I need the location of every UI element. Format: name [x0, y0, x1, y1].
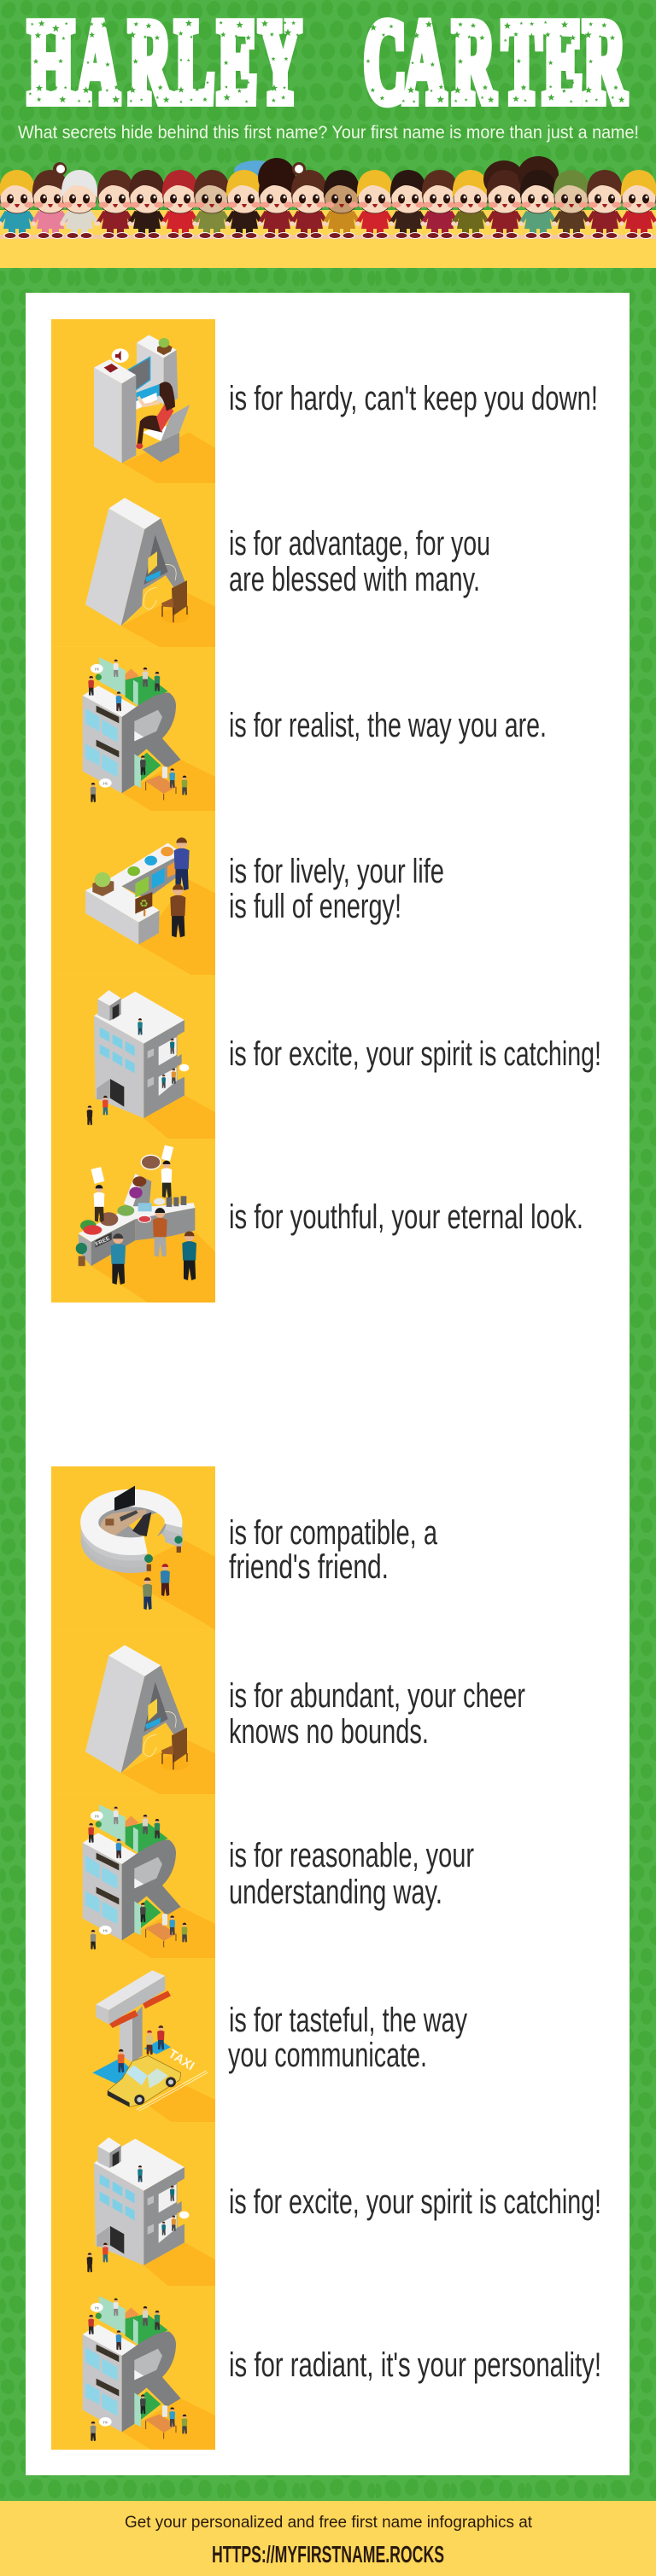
panel: white content card: [26, 293, 630, 2475]
row: R is for realist: [51, 647, 547, 811]
row: T is for tasteful: [51, 1958, 477, 2122]
illustration: letter C reception desk: [51, 1466, 215, 1630]
text: A lines: are blessed with many.: [229, 561, 480, 598]
row: R is for radiant: [51, 2286, 601, 2450]
text: A lines: knows no bounds.: [229, 1713, 429, 1751]
illustration: row of cartoon children holding hands: [0, 156, 656, 239]
title: Harley Carter: [28, 0, 627, 126]
illustration: letter R: [51, 2286, 215, 2450]
illustration: letter A: [51, 1630, 215, 1794]
text: C lines: is for compatible, a: [229, 1514, 438, 1552]
text: A lines: is for advantage, for you: [229, 525, 490, 562]
illustration: letter L recycling counter: [51, 811, 215, 975]
illustration: letter Y buffet: [51, 1139, 215, 1303]
text: A lines: is for abundant, your cheer: [229, 1677, 525, 1715]
footer url: HTTPS://MYFIRSTNAME.ROCKS: [212, 2541, 444, 2567]
illustration: letter R: [51, 1794, 215, 1958]
illustration: letter Y buffet: FREE: [95, 1235, 111, 1248]
illustration: letter L recycling counter: ♻: [139, 898, 149, 910]
illustration: letter A: [51, 483, 215, 647]
title star cut-outs: HARLEY: [28, 20, 299, 103]
illustration: letter H office desk: [51, 319, 215, 483]
title star cut-outs: CARTER: [366, 20, 624, 103]
row: Y is for youthful: [51, 1139, 583, 1303]
row: A is for abundant: [51, 1630, 535, 1794]
text: T lines: is for tasteful, the way: [229, 2002, 467, 2039]
footer text: Get your personalized and free first name infographics at: [125, 2514, 533, 2532]
illustration: letter T taxi stand: [51, 1958, 215, 2122]
row: H is for hardy: [51, 319, 598, 483]
illustration: letter E building: [51, 2122, 215, 2286]
yellow band behind the characters: [0, 210, 656, 268]
text: R lines: is for reasonable, your: [229, 1837, 474, 1874]
text: L lines: is full of energy!: [229, 888, 401, 925]
footer: yellow call to action: [0, 2501, 656, 2576]
title: Harley Carter: CARTER: [364, 0, 627, 126]
row: E is for excite: [51, 975, 601, 1139]
text: L lines: is for lively, your life: [229, 853, 444, 890]
illustration: letter T taxi stand: TAXI: [166, 2048, 196, 2073]
row: A is for advantage: [51, 483, 500, 647]
illustration: letter E building: [51, 975, 215, 1139]
row: L is for lively: [51, 811, 454, 975]
row: R is for reasonable: [51, 1794, 483, 1958]
title: Harley Carter: HARLEY: [28, 0, 301, 126]
text: R lines: understanding way.: [229, 1874, 442, 1911]
row: C is for compatible: [51, 1466, 447, 1630]
row: E is for excite (second): [51, 2122, 601, 2286]
illustration: letter R: [51, 647, 215, 811]
text: C lines: friend's friend.: [229, 1548, 389, 1586]
text: T lines: you communicate.: [228, 2037, 427, 2074]
